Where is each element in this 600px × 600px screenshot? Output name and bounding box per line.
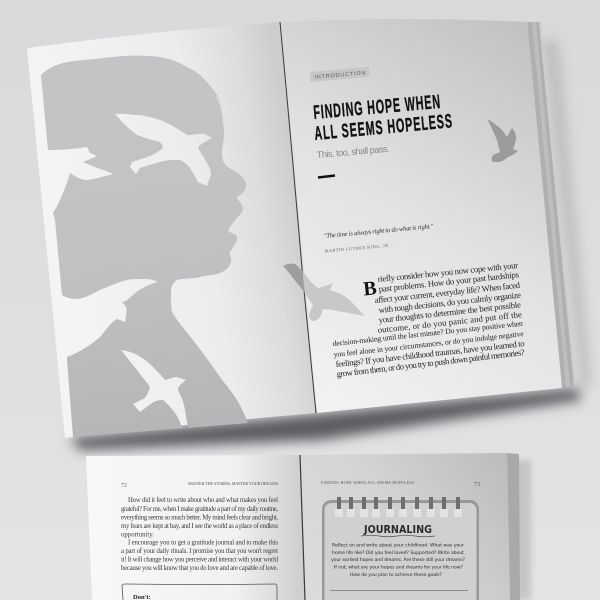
drop cap: B — [362, 277, 378, 300]
body paragraph with drop cap: riefly consider how you now cope with your — [377, 260, 519, 284]
left page — [86, 455, 305, 600]
right page — [281, 19, 562, 413]
left page body text: because you will know that you do love and are capable of love. — [121, 565, 278, 572]
journaling notebook panel — [322, 497, 479, 600]
quote: "The time is always right to do what is right." — [324, 223, 434, 240]
body paragraph with drop cap: affect your current, everyday life? When faced — [374, 280, 521, 305]
left page body text: everything seems so much better. My mind feels clear and bright, — [121, 514, 278, 522]
body paragraph with drop cap: outcome, or do you panic and put off the — [377, 309, 522, 335]
hair strand detail — [216, 96, 223, 126]
left page body text: How did it feel to write about who and what makes you feel — [128, 497, 278, 504]
body paragraph with drop cap: past problems. How do your past hardships — [378, 269, 520, 294]
body paragraph with drop cap: you feel alone in your circumstances, or do you indulge negative — [333, 329, 525, 359]
body paragraph with drop cap: decision-making until the last minute? Do you stay positive when — [332, 319, 523, 348]
journaling prompt: Reflect on and write about your childhood. What was your — [332, 542, 464, 548]
top book shadow — [70, 40, 592, 450]
left page body text: grateful? For me, when I make gratitude a part of my daily routine, — [121, 506, 278, 513]
left page body text — [121, 497, 279, 572]
right page — [300, 453, 510, 600]
white punch holes — [335, 509, 462, 517]
page edge block — [507, 453, 520, 600]
left running header: MASTER THE STORMS, MASTER YOUR DREAMS — [188, 481, 279, 487]
title — [313, 92, 453, 145]
body paragraph with drop cap: feelings? If you have childhood traumas, have you learned to — [335, 338, 526, 369]
bird: across gutter — [283, 264, 365, 321]
gutter line — [300, 455, 305, 600]
introduction label: INTRODUCTION — [314, 70, 366, 81]
left page — [27, 22, 316, 438]
body paragraph with drop cap: grow from them, or do you try to push down painful memories? — [336, 347, 525, 379]
right running header: FINDING HOPE WHEN ALL SEEMS HOPELESS — [321, 480, 414, 485]
left page body text: opportunity. — [121, 532, 154, 538]
quote attribution: MARTIN LUTHER KING, JR. — [325, 243, 390, 254]
journaling prompt: If not, what are your hopes and dreams for your life now? — [334, 564, 464, 570]
title: ALL SEEMS HOPELESS — [314, 111, 453, 145]
introduction label — [310, 67, 370, 82]
body paragraph with drop cap: with tough decisions, do you calmly organize — [378, 290, 522, 315]
spiral rings — [337, 497, 460, 509]
title: FINDING HOPE WHEN — [313, 92, 441, 124]
bottom book shadow — [505, 460, 531, 600]
right page number: 73 — [474, 482, 480, 488]
left page body text: a part of your daily rituals. I promise you that you won't regret — [121, 548, 278, 555]
left page body text: I encourage you to get a gratitude journal and to make this — [128, 540, 278, 546]
left page body text: my fears are kept at bay, and I see the world as a place of endless — [121, 523, 278, 530]
top book: open spread — [27, 19, 576, 438]
journaling heading: JOURNALING — [363, 524, 432, 536]
body paragraph with drop cap — [332, 260, 526, 379]
left page number: 72 — [121, 483, 127, 489]
gutter line — [280, 22, 316, 413]
journaling prompt: How do you plan to achieve these goals? — [350, 572, 442, 578]
journaling prompt — [331, 542, 466, 578]
left page body text: it! It will change how you perceive and interact with your world — [121, 556, 279, 564]
journaling prompt: home life like? Did you feel loved? Supported? Write about — [332, 550, 464, 556]
squiggle underline — [361, 535, 435, 537]
subtitle: This, too, shall pass. — [316, 144, 390, 160]
short rule — [318, 176, 335, 178]
body paragraph with drop cap: your thoughts to determine the best possible — [378, 299, 521, 325]
writing line — [330, 590, 468, 592]
silhouette of head and shoulders with negative-space birds — [41, 56, 248, 437]
journaling prompt: your earliest hopes and dreams. Are these still your dreams? — [331, 557, 466, 563]
don't box — [122, 584, 277, 600]
bottom book: open spread — [86, 453, 531, 600]
bird: upper right — [487, 119, 518, 162]
page edge block: right side — [527, 22, 576, 388]
